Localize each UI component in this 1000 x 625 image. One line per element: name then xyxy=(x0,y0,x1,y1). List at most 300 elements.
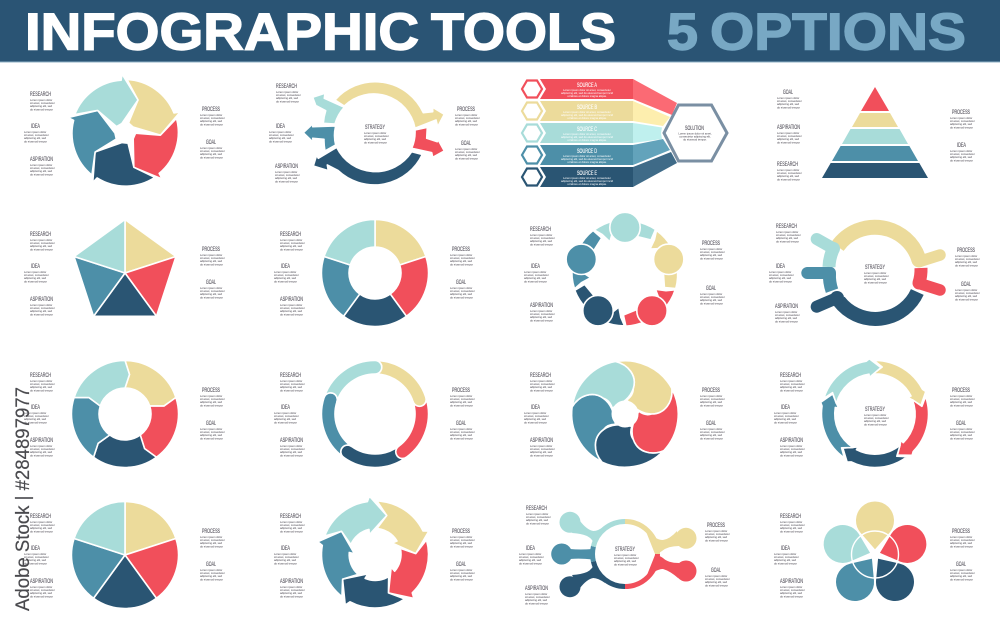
label: idea: IDEA xyxy=(781,404,790,411)
label: goal: Lorem ipsum dolor xyxy=(200,569,222,572)
source C: Lorem ipsum dolor sit amet, consectetur xyxy=(563,133,611,136)
label: goal: GOAL xyxy=(206,420,216,427)
panel: pie xyxy=(24,490,225,625)
source B: Lorem ipsum dolor sit amet, consectetur xyxy=(563,111,611,114)
label: idea xyxy=(774,545,799,565)
label: goal: adipiscing elit, sed xyxy=(200,152,222,156)
label: idea xyxy=(274,404,299,424)
label: idea: Lorem ipsum dolor xyxy=(524,271,546,274)
label: process: adipiscing elit, sed xyxy=(200,541,222,545)
label: goal xyxy=(450,279,475,299)
label: research: RESEARCH xyxy=(30,91,51,98)
label: process: PROCESS xyxy=(707,522,725,529)
label: aspiration xyxy=(775,303,800,323)
label: process: Lorem ipsum dolor xyxy=(200,536,222,539)
panel: rounded ring xyxy=(274,349,475,487)
label: research: do eiusmod tempor xyxy=(526,521,549,525)
label: process: adipiscing elit, sed xyxy=(200,400,222,404)
label: process: PROCESS xyxy=(202,528,220,535)
label: research: sit amet, consectetur xyxy=(780,382,805,386)
label: aspiration: ASPIRATION xyxy=(280,437,303,444)
label: research: adipiscing elit, sed xyxy=(30,526,52,530)
source A xyxy=(522,79,633,99)
label: aspiration: ASPIRATION xyxy=(775,303,798,310)
label: research: Lorem ipsum dolor xyxy=(30,380,52,383)
source E xyxy=(522,167,633,187)
label: idea xyxy=(274,263,299,283)
label: goal: Lorem ipsum dolor xyxy=(700,428,722,431)
label: goal: do eiusmod tempor xyxy=(700,301,723,305)
label: process: adipiscing elit, sed xyxy=(950,400,972,404)
label: research: sit amet, consectetur xyxy=(276,93,301,97)
label: research: do eiusmod tempor xyxy=(780,529,803,533)
label: goal: sit amet, consectetur xyxy=(200,571,225,575)
label: goal: sit amet, consectetur xyxy=(700,430,725,434)
label: goal: Lorem ipsum dolor xyxy=(700,293,722,296)
label: process: do eiusmod tempor xyxy=(450,544,473,548)
label: research: sit amet, consectetur xyxy=(280,241,305,245)
chart: swirl xyxy=(556,353,690,485)
label: research: do eiusmod tempor xyxy=(276,99,299,103)
title xyxy=(25,4,616,62)
label: research: RESEARCH xyxy=(777,161,798,168)
label: goal: adipiscing elit, sed xyxy=(450,292,472,296)
solution hexagon xyxy=(664,105,727,161)
label: aspiration: Lorem ipsum dolor xyxy=(280,304,302,307)
label: idea: Lorem ipsum dolor xyxy=(519,553,541,556)
label: idea: do eiusmod tempor xyxy=(769,279,792,283)
label: aspiration: do eiusmod tempor xyxy=(275,179,298,183)
label: aspiration: Lorem ipsum dolor xyxy=(530,310,552,313)
label: idea: Lorem ipsum dolor xyxy=(24,131,46,134)
label: process: sit amet, consectetur xyxy=(455,116,480,120)
label: process: do eiusmod tempor xyxy=(455,122,478,126)
label: idea: sit amet, consectetur xyxy=(774,555,799,559)
label: goal: GOAL xyxy=(961,281,971,288)
label: research: Lorem ipsum dolor xyxy=(30,99,52,102)
label: idea: do eiusmod tempor xyxy=(519,561,542,565)
solution hexagon: do eiusmod tempor. xyxy=(683,138,707,142)
label: goal: do eiusmod tempor xyxy=(455,156,478,160)
center label: strategy xyxy=(364,124,389,144)
label: aspiration: ASPIRATION xyxy=(30,156,53,163)
label: process: do eiusmod tempor xyxy=(450,262,473,266)
label: goal: adipiscing elit, sed xyxy=(950,433,972,437)
label: aspiration: do eiusmod tempor xyxy=(280,594,303,598)
label: process: sit amet, consectetur xyxy=(200,538,225,542)
label: aspiration: Lorem ipsum dolor xyxy=(30,445,52,448)
label: aspiration xyxy=(777,124,802,144)
label: aspiration: do eiusmod tempor xyxy=(525,601,548,605)
label: aspiration: Lorem ipsum dolor xyxy=(280,445,302,448)
label: goal: sit amet, consectetur xyxy=(950,430,975,434)
label: goal: sit amet, consectetur xyxy=(450,430,475,434)
label: idea: do eiusmod tempor xyxy=(774,561,797,565)
label: aspiration: ASPIRATION xyxy=(30,437,53,444)
label: goal: Lorem ipsum dolor xyxy=(705,575,727,578)
label: aspiration: sit amet, consectetur xyxy=(30,306,55,310)
label: goal: Lorem ipsum dolor xyxy=(450,569,472,572)
label: aspiration: sit amet, consectetur xyxy=(530,312,555,316)
label: aspiration xyxy=(530,437,555,457)
label: goal: do eiusmod tempor xyxy=(200,155,223,159)
label: process: PROCESS xyxy=(452,528,470,535)
label: idea: do eiusmod tempor xyxy=(269,139,292,143)
label: aspiration: sit amet, consectetur xyxy=(280,447,305,451)
label: process xyxy=(950,528,975,548)
label: goal: GOAL xyxy=(206,279,216,286)
label: research: Lorem ipsum dolor xyxy=(526,513,548,516)
label: idea: do eiusmod tempor xyxy=(24,420,47,424)
label: goal: GOAL xyxy=(706,420,716,427)
label: idea: Lorem ipsum dolor xyxy=(774,553,796,556)
source B: ut labore et dolore magna aliqua. xyxy=(567,116,607,120)
label: idea: adipiscing elit, sed xyxy=(24,558,46,562)
label: aspiration: adipiscing elit, sed xyxy=(777,137,799,141)
label: goal: sit amet, consectetur xyxy=(777,99,802,103)
label: aspiration: Lorem ipsum dolor xyxy=(780,445,802,448)
label: goal: adipiscing elit, sed xyxy=(200,292,222,296)
label: aspiration: sit amet, consectetur xyxy=(530,447,555,451)
label: research: do eiusmod tempor xyxy=(30,388,53,392)
label: aspiration: Lorem ipsum dolor xyxy=(530,445,552,448)
label: aspiration: Lorem ipsum dolor xyxy=(30,164,52,167)
label: aspiration: ASPIRATION xyxy=(780,578,803,585)
panel: pinwheel arrows xyxy=(24,64,225,209)
panel: pentagon xyxy=(24,220,225,316)
panel: swirl xyxy=(524,353,725,485)
label: process: sit amet, consectetur xyxy=(950,119,975,123)
chart: pentagon xyxy=(74,220,176,316)
label: research: Lorem ipsum dolor xyxy=(276,91,298,94)
solution hexagon: Lorem ipsum dolor sit amet, xyxy=(678,132,712,136)
panel: metaball strategy ring xyxy=(519,505,730,605)
label: aspiration: adipiscing elit, sed xyxy=(280,591,302,595)
chart: thin arrow ring xyxy=(802,349,942,487)
label: aspiration: Lorem ipsum dolor xyxy=(775,311,797,314)
label: process xyxy=(455,106,480,126)
label: idea: sit amet, consectetur xyxy=(24,273,49,277)
label: aspiration: do eiusmod tempor xyxy=(280,453,303,457)
label: aspiration xyxy=(780,578,805,598)
label: research: sit amet, consectetur xyxy=(280,382,305,386)
label: goal: Lorem ipsum dolor xyxy=(955,289,977,292)
label: goal: adipiscing elit, sed xyxy=(955,294,977,298)
label: idea: IDEA xyxy=(776,263,785,270)
label: research: sit amet, consectetur xyxy=(780,523,805,527)
label: research xyxy=(280,513,305,533)
center label: strategy: do eiusmod tempor xyxy=(864,422,887,426)
chart: flower xyxy=(818,501,932,610)
label: idea: IDEA xyxy=(957,142,966,149)
label: research xyxy=(777,161,802,181)
label: research: RESEARCH xyxy=(280,513,301,520)
label: aspiration xyxy=(30,578,55,598)
label: goal: GOAL xyxy=(206,561,216,568)
label: idea xyxy=(774,404,799,424)
source C: ut labore et dolore magna aliqua. xyxy=(567,138,607,142)
label: research: adipiscing elit, sed xyxy=(280,385,302,389)
label: goal: Lorem ipsum dolor xyxy=(455,148,477,151)
label: aspiration: sit amet, consectetur xyxy=(280,588,305,592)
center label: strategy: STRATEGY xyxy=(865,406,885,413)
label: process: sit amet, consectetur xyxy=(950,397,975,401)
label: aspiration: sit amet, consectetur xyxy=(775,313,800,317)
source A: ut labore et dolore magna aliqua. xyxy=(567,94,607,98)
chart: bold arrow ring xyxy=(300,487,443,625)
label: process: adipiscing elit, sed xyxy=(450,400,472,404)
center label: strategy: STRATEGY xyxy=(865,264,885,271)
label: idea: IDEA xyxy=(31,263,40,270)
label: research xyxy=(776,223,801,243)
label: process: do eiusmod tempor xyxy=(450,403,473,407)
label: idea: sit amet, consectetur xyxy=(524,273,549,277)
label: aspiration: do eiusmod tempor xyxy=(30,453,53,457)
subtitle: 5 xyxy=(667,4,698,62)
label: idea: IDEA xyxy=(281,263,290,270)
label: research: Lorem ipsum dolor xyxy=(280,380,302,383)
label: process: sit amet, consectetur xyxy=(450,538,475,542)
label: process: adipiscing elit, sed xyxy=(700,400,722,404)
label: idea: do eiusmod tempor xyxy=(24,561,47,565)
label: research: adipiscing elit, sed xyxy=(276,96,298,100)
label: research: RESEARCH xyxy=(776,223,797,230)
label: research: do eiusmod tempor xyxy=(280,529,303,533)
label: aspiration: adipiscing elit, sed xyxy=(530,450,552,454)
label: idea: adipiscing elit, sed xyxy=(519,558,541,562)
label: process: PROCESS xyxy=(957,247,975,254)
label: idea: Lorem ipsum dolor xyxy=(274,412,296,415)
label: aspiration: sit amet, consectetur xyxy=(30,166,55,170)
label: process: adipiscing elit, sed xyxy=(200,259,222,263)
label: idea xyxy=(24,404,49,424)
header banner xyxy=(0,0,1000,62)
label: research: RESEARCH xyxy=(530,226,551,233)
label: aspiration: do eiusmod tempor xyxy=(530,453,553,457)
label: aspiration: Lorem ipsum dolor xyxy=(30,586,52,589)
panel: bold arrow ring xyxy=(274,487,475,625)
label: research: sit amet, consectetur xyxy=(30,241,55,245)
center label: strategy xyxy=(864,264,889,284)
label: goal: do eiusmod tempor xyxy=(450,577,473,581)
label: idea: adipiscing elit, sed xyxy=(774,558,796,562)
label: idea: IDEA xyxy=(31,123,40,130)
center label: strategy: sit amet, consectetur xyxy=(614,556,639,560)
center label: strategy: Lorem ipsum dolor xyxy=(364,132,386,135)
label: process: adipiscing elit, sed xyxy=(950,541,972,545)
label: goal: GOAL xyxy=(456,279,466,286)
label: idea: sit amet, consectetur xyxy=(519,555,544,559)
label: idea: sit amet, consectetur xyxy=(950,152,975,156)
label: aspiration: adipiscing elit, sed xyxy=(530,315,552,319)
title: TOOLS xyxy=(431,4,616,62)
label: idea: do eiusmod tempor xyxy=(524,279,547,283)
label: idea: Lorem ipsum dolor xyxy=(950,150,972,153)
label: idea: sit amet, consectetur xyxy=(274,414,299,418)
label: process: do eiusmod tempor xyxy=(950,544,973,548)
label: idea: Lorem ipsum dolor xyxy=(24,553,46,556)
label: process: do eiusmod tempor xyxy=(705,538,728,542)
label: process: PROCESS xyxy=(702,387,720,394)
label: process: adipiscing elit, sed xyxy=(450,541,472,545)
label: idea: IDEA xyxy=(31,545,40,552)
label: idea xyxy=(274,545,299,565)
label: process: sit amet, consectetur xyxy=(700,397,725,401)
label: process: do eiusmod tempor xyxy=(950,125,973,129)
label: idea: Lorem ipsum dolor xyxy=(769,271,791,274)
label: idea xyxy=(24,545,49,565)
label: goal xyxy=(950,420,975,440)
label: process: adipiscing elit, sed xyxy=(955,260,977,264)
label: idea: sit amet, consectetur xyxy=(24,133,49,137)
center label: strategy: do eiusmod tempor xyxy=(364,140,387,144)
label: goal: adipiscing elit, sed xyxy=(705,580,727,584)
label: process: do eiusmod tempor xyxy=(950,403,973,407)
label: research: Lorem ipsum dolor xyxy=(780,521,802,524)
label: goal: Lorem ipsum dolor xyxy=(950,428,972,431)
label: research: adipiscing elit, sed xyxy=(776,236,798,240)
panel: ring with rounded arms xyxy=(769,223,980,323)
label: aspiration: ASPIRATION xyxy=(530,302,553,309)
label: research xyxy=(30,231,55,251)
label: process xyxy=(450,528,475,548)
label: goal: do eiusmod tempor xyxy=(950,577,973,581)
label: research: RESEARCH xyxy=(526,505,547,512)
source B xyxy=(522,101,633,121)
label: research: Lorem ipsum dolor xyxy=(776,231,798,234)
label: aspiration: do eiusmod tempor xyxy=(530,318,553,322)
label: process: adipiscing elit, sed xyxy=(705,535,727,539)
label: process: PROCESS xyxy=(202,106,220,113)
funnel connectors xyxy=(633,79,677,187)
label: aspiration: do eiusmod tempor xyxy=(30,172,53,176)
label: process: Lorem ipsum dolor xyxy=(700,248,722,251)
label: goal: GOAL xyxy=(206,139,216,146)
center label: strategy xyxy=(614,546,639,566)
label: goal: GOAL xyxy=(956,561,966,568)
label: process: adipiscing elit, sed xyxy=(200,119,222,123)
source B: SOURCE B xyxy=(577,104,597,111)
label: process xyxy=(450,246,475,266)
label: goal: sit amet, consectetur xyxy=(450,571,475,575)
label: idea: sit amet, consectetur xyxy=(274,555,299,559)
label: research: RESEARCH xyxy=(276,83,297,90)
label: aspiration xyxy=(530,302,555,322)
label: process: do eiusmod tempor xyxy=(200,122,223,126)
label: aspiration: sit amet, consectetur xyxy=(780,588,805,592)
label: process: PROCESS xyxy=(452,387,470,394)
label: research: Lorem ipsum dolor xyxy=(777,169,799,172)
label: idea: Lorem ipsum dolor xyxy=(24,412,46,415)
label: process: adipiscing elit, sed xyxy=(950,122,972,126)
chart: notched donut xyxy=(52,349,192,487)
label: idea: adipiscing elit, sed xyxy=(274,417,296,421)
label: process: Lorem ipsum dolor xyxy=(455,114,477,117)
label: aspiration xyxy=(525,585,550,605)
label: idea: IDEA xyxy=(276,123,285,130)
label: process: PROCESS xyxy=(952,109,970,116)
label: process: Lorem ipsum dolor xyxy=(450,395,472,398)
label: idea: Lorem ipsum dolor xyxy=(524,412,546,415)
label: aspiration: Lorem ipsum dolor xyxy=(275,171,297,174)
label: process: sit amet, consectetur xyxy=(200,116,225,120)
label: research: sit amet, consectetur xyxy=(526,515,551,519)
label: goal: GOAL xyxy=(711,567,721,574)
label: research: adipiscing elit, sed xyxy=(780,385,802,389)
label: goal: adipiscing elit, sed xyxy=(200,433,222,437)
label: process: sit amet, consectetur xyxy=(955,257,980,261)
label: process: adipiscing elit, sed xyxy=(455,119,477,123)
center label: strategy: adipiscing elit, sed xyxy=(864,277,886,281)
source C: adipiscing elit, sed do eiusmod tempor incid xyxy=(561,135,613,139)
center label: strategy: STRATEGY xyxy=(365,124,385,131)
label: research: sit amet, consectetur xyxy=(777,171,802,175)
source C: SOURCE C xyxy=(577,126,597,133)
label: goal: sit amet, consectetur xyxy=(450,289,475,293)
label: idea: adipiscing elit, sed xyxy=(269,136,291,140)
label: aspiration: ASPIRATION xyxy=(780,437,803,444)
label: goal: sit amet, consectetur xyxy=(955,291,980,295)
source A: adipiscing elit, sed do eiusmod tempor incid xyxy=(561,91,613,95)
label: goal: adipiscing elit, sed xyxy=(777,102,799,106)
label: process: Lorem ipsum dolor xyxy=(705,530,727,533)
label: aspiration: ASPIRATION xyxy=(30,578,53,585)
label: research: Lorem ipsum dolor xyxy=(280,239,302,242)
chart: donut xyxy=(302,208,442,346)
label: research: RESEARCH xyxy=(780,513,801,520)
label: aspiration: do eiusmod tempor xyxy=(780,453,803,457)
label: research: Lorem ipsum dolor xyxy=(30,239,52,242)
label: aspiration xyxy=(280,296,305,316)
label: research: sit amet, consectetur xyxy=(530,382,555,386)
label: aspiration: adipiscing elit, sed xyxy=(280,309,302,313)
solution hexagon: SOLUTION xyxy=(685,125,704,132)
label: goal: do eiusmod tempor xyxy=(950,436,973,440)
label: aspiration: adipiscing elit, sed xyxy=(280,450,302,454)
label: goal xyxy=(450,420,475,440)
label: idea: adipiscing elit, sed xyxy=(274,276,296,280)
label: aspiration: Lorem ipsum dolor xyxy=(30,304,52,307)
panel: notched donut xyxy=(24,349,225,487)
label: idea: sit amet, consectetur xyxy=(269,133,294,137)
label: goal: sit amet, consectetur xyxy=(455,150,480,154)
label: process: do eiusmod tempor xyxy=(955,263,978,267)
label: goal: sit amet, consectetur xyxy=(200,289,225,293)
label: research: sit amet, consectetur xyxy=(30,101,55,105)
label: process: Lorem ipsum dolor xyxy=(950,536,972,539)
source E: Lorem ipsum dolor sit amet, consectetur xyxy=(563,177,611,180)
label: goal: do eiusmod tempor xyxy=(777,105,800,109)
label: aspiration: ASPIRATION xyxy=(280,296,303,303)
label: research: adipiscing elit, sed xyxy=(30,244,52,248)
label: goal: do eiusmod tempor xyxy=(200,295,223,299)
label: process: Lorem ipsum dolor xyxy=(450,254,472,257)
label: aspiration: do eiusmod tempor xyxy=(30,594,53,598)
label: goal: GOAL xyxy=(461,140,471,147)
chart: pie xyxy=(52,490,192,625)
label: idea: adipiscing elit, sed xyxy=(24,417,46,421)
label: aspiration: adipiscing elit, sed xyxy=(275,176,297,180)
label: goal: sit amet, consectetur xyxy=(950,571,975,575)
chart: circles on a ring xyxy=(557,212,689,342)
label: idea: adipiscing elit, sed xyxy=(769,276,791,280)
label: process: do eiusmod tempor xyxy=(700,403,723,407)
label: idea: sit amet, consectetur xyxy=(769,273,794,277)
label: process: PROCESS xyxy=(202,246,220,253)
label: research: Lorem ipsum dolor xyxy=(30,521,52,524)
label: research: RESEARCH xyxy=(30,231,51,238)
label: aspiration: ASPIRATION xyxy=(280,578,303,585)
